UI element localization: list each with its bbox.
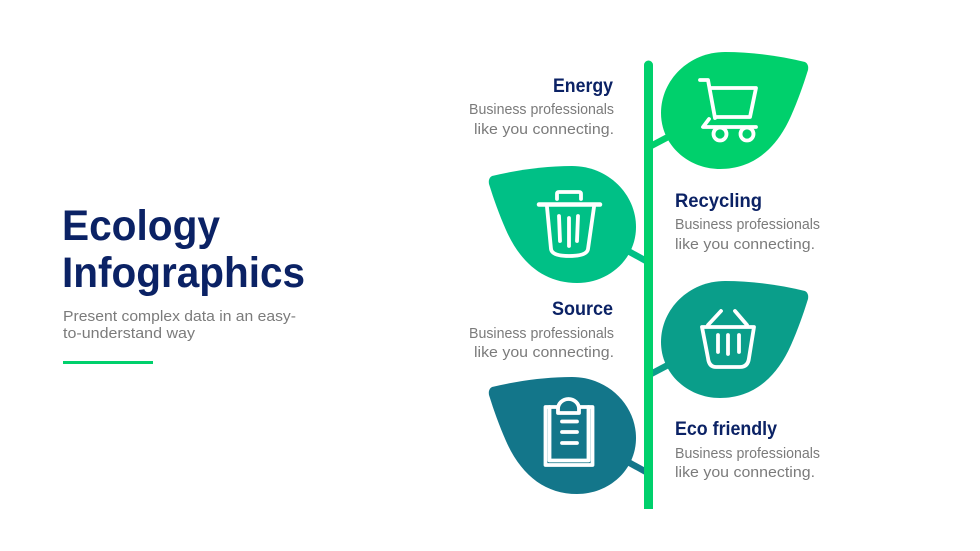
subtitle: Present complex data in an easy- bbox=[63, 308, 296, 325]
label: eco friendly bbox=[675, 419, 820, 481]
label: recycling: Recycling bbox=[675, 191, 762, 212]
label: recycling: Business professionals bbox=[675, 216, 820, 233]
label: eco friendly: Eco friendly bbox=[675, 419, 777, 440]
icon: clipboard bbox=[546, 399, 592, 465]
title bbox=[62, 202, 305, 297]
label: source: Source bbox=[552, 299, 613, 320]
label: recycling: like you connecting. bbox=[675, 236, 815, 253]
subtitle: to-understand way bbox=[63, 325, 196, 342]
plant stem bbox=[644, 60, 653, 509]
title underline bbox=[63, 361, 153, 364]
icon: trash bin bbox=[539, 192, 600, 256]
subtitle bbox=[63, 308, 296, 342]
label: recycling bbox=[675, 191, 820, 253]
leaf: energy bbox=[649, 52, 808, 169]
label: eco friendly: like you connecting. bbox=[675, 464, 815, 481]
label: source: like you connecting. bbox=[474, 344, 614, 361]
label: energy: like you connecting. bbox=[474, 121, 614, 138]
icon: shopping cart bbox=[700, 80, 756, 140]
label: energy: Business professionals bbox=[469, 101, 614, 118]
leaf: source bbox=[489, 377, 648, 494]
label: energy bbox=[469, 76, 614, 138]
leaf: recycling bbox=[489, 166, 648, 283]
label: source bbox=[469, 299, 614, 361]
leaf: eco friendly bbox=[649, 281, 808, 398]
icon: shopping basket bbox=[702, 311, 754, 367]
title: Infographics bbox=[62, 249, 305, 297]
label: source: Business professionals bbox=[469, 325, 614, 342]
label: energy: Energy bbox=[553, 76, 613, 97]
label: eco friendly: Business professionals bbox=[675, 445, 820, 462]
title: Ecology bbox=[62, 202, 220, 250]
